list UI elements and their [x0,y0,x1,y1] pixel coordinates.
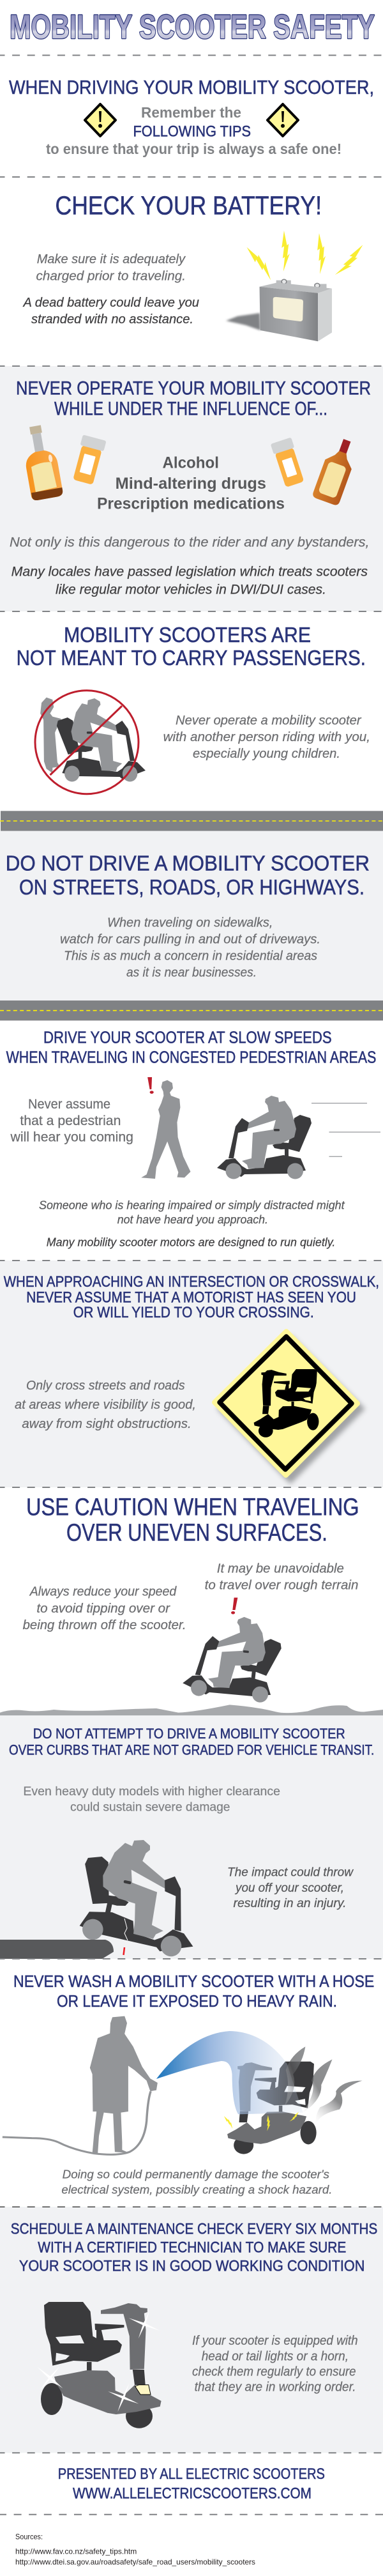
icon: no passengers [35,691,146,794]
intersection text: at areas where visibility is good, [15,1398,196,1412]
speed lines [312,1103,380,1156]
panel: uneven surfaces [0,1494,383,1715]
curbs text top: Even heavy duty models with higher clearance [23,1785,280,1798]
sources: http://www.dtei.sa.gov.au/roadsafety/safe_road_users/mobility_scooters [15,2557,255,2566]
panel: passengers [17,624,370,794]
intersection heading [4,1273,379,1321]
icon: liquor bottle right [312,436,360,507]
uneven text left: to avoid tipping over or [36,1602,170,1616]
uneven heading: OVER UNEVEN SURFACES. [66,1520,327,1547]
slow speeds heading [6,1029,376,1066]
passengers text: especially young children. [193,747,340,761]
icon: pedestrian with alert [141,1077,191,1179]
footer credit [58,2465,325,2503]
streets text: When traveling on sidewalks, [107,916,273,930]
passengers heading [17,624,366,670]
road divider top [0,811,383,831]
icon: pill bottle left [71,434,107,486]
curbs background [0,1715,383,1959]
influence heading [16,378,371,419]
icon: scooter tipping off curb [70,1829,213,1961]
panel: battery [22,191,367,341]
streets background [0,831,383,1000]
intersection text: Only cross streets and roads [26,1379,185,1393]
panel: intro [9,76,374,157]
curbs text top: could sustain severe damage [70,1800,230,1814]
intro text: to ensure that your trip is always a safe one! [46,141,342,157]
intersection text: away from sight obstructions. [22,1417,192,1431]
intersection background [0,1261,383,1487]
icon: warning left [85,104,116,136]
influence background [0,366,383,611]
uneven text left [23,1585,186,1632]
pedestrian text [10,1097,133,1145]
curbs text right: you off your scooter, [234,1882,344,1895]
passengers text [163,714,370,761]
influence list: Alcohol [162,454,219,472]
streets heading: DO NOT DRIVE A MOBILITY SCOOTER [6,852,370,876]
influence text: like regular motor vehicles in DWI/DUI cases. [56,582,326,597]
washing heading: OR LEAVE IT EXPOSED TO HEAVY RAIN. [57,1991,337,2011]
maintenance text [192,2334,358,2395]
uneven text right: to travel over rough terrain [205,1579,358,1593]
streets text [60,916,320,979]
passengers text: with another person riding with you, [163,730,370,744]
slow speeds text: Someone who is hearing impaired or simply distracted might [39,1198,345,1211]
streets text: watch for cars pulling in and out of driveways. [60,933,320,947]
maintenance text: If your scooter is equipped with [192,2334,358,2348]
uneven text left: Always reduce your speed [29,1585,177,1599]
passengers text: Never operate a mobility scooter [176,714,362,728]
icon: whiskey bottle left [19,424,64,501]
pedestrian text: that a pedestrian [20,1114,121,1128]
battery text: A dead battery could leave you [22,296,199,310]
maintenance text: that they are in working order. [195,2380,356,2395]
battery text: stranded with no assistance. [31,312,193,326]
influence text [10,535,370,597]
icon: alert [231,1598,237,1614]
passengers heading: MOBILITY SCOOTERS ARE [64,624,311,647]
influence list: Prescription medications [97,495,285,513]
panel: intersection [0,1261,383,1487]
panel: curbs [0,1715,383,1961]
streets heading [6,852,370,900]
influence heading: WHILE UNDER THE INFLUENCE OF... [54,398,327,419]
water spray [156,2031,303,2114]
panel: slow speeds [6,1029,380,1249]
road divider bottom [0,1000,383,1020]
icon: damaged scooter [223,2062,317,2154]
slow speeds text: not have heard you approach. [117,1213,268,1226]
smoke [285,2046,363,2124]
panel: maintenance [0,2207,383,2453]
icon: yellow scooter sign [214,1331,365,1484]
curb [0,1940,114,1959]
footer credit: PRESENTED BY ALL ELECTRIC SCOOTERS [58,2465,325,2483]
pedestrian text: Never assume [28,1097,110,1112]
intersection text [15,1379,196,1431]
battery text: charged prior to traveling. [36,270,186,284]
streets text: This is as much a concern in residential areas [64,949,317,963]
icon: pill bottle right [271,438,305,487]
maintenance text: head or tail lights or a horn, [202,2349,349,2363]
washing text [61,2167,332,2196]
intro text: Remember the [141,104,241,121]
washing text: Doing so could permanently damage the scooter's [63,2167,329,2181]
influence text: Not only is this dangerous to the rider and any bystanders, [10,535,370,550]
battery text: Make sure it is adequately [37,252,186,266]
icon: warning right [267,104,298,136]
curbs text right: resulting in an injury. [234,1897,346,1910]
icon: scooter on rough terrain [181,1611,284,1704]
panel: streets [0,831,383,1000]
uneven heading [26,1494,359,1547]
icon: scooter with rider [217,1096,312,1179]
uneven text right: It may be unavoidable [217,1562,344,1576]
curbs heading: DO NOT ATTEMPT TO DRIVE A MOBILITY SCOOTER [33,1726,345,1742]
curbs heading [9,1726,374,1758]
battery text [22,252,199,326]
influence list: Mind-altering drugs [116,475,266,493]
streets text: as it is near businesses. [126,965,257,979]
panel: influence [0,366,383,611]
sources [15,2532,255,2566]
sources: Sources: [15,2532,43,2541]
icon: lightning bolts [245,231,367,282]
influence text: Many locales have passed legislation which treats scooters [11,565,368,579]
intro text: FOLLOWING TIPS [133,123,251,141]
footer credit: WWW.ALLELECTRICSCOOTERS.COM [73,2485,312,2503]
influence list [97,454,285,513]
maintenance heading: WITH A CERTIFIED TECHNICIAN TO MAKE SURE [38,2239,346,2257]
washing text: electrical system, possibly creating a shock hazard. [61,2182,332,2196]
slow speeds heading: DRIVE YOUR SCOOTER AT SLOW SPEEDS [43,1029,332,1047]
uneven text left: being thrown off the scooter. [23,1618,186,1632]
maintenance text: check them regularly to ensure [192,2365,356,2379]
curbs text right [227,1866,354,1910]
curbs text right: The impact could throw [227,1866,354,1880]
curbs text top [23,1785,280,1814]
intersection heading: OR WILL YIELD TO YOUR CROSSING. [73,1304,314,1321]
sources: http://www.fav.co.nz/safety_tips.htm [15,2547,137,2556]
icon: scooter with highlights [27,2302,165,2428]
panel: washing [3,1972,374,2196]
battery heading: CHECK YOUR BATTERY! [55,191,322,220]
slow speeds text: Many mobility scooter motors are designed to run quietly. [47,1236,335,1249]
washing heading [13,1972,374,2011]
maintenance background [0,2207,383,2453]
slow speeds text [39,1198,345,1249]
uneven text right [205,1562,358,1593]
icon: battery [226,279,332,341]
intro text [46,104,342,157]
uneven ground [0,1705,383,1715]
maintenance heading [11,2221,377,2275]
pedestrian text: will hear you coming [10,1130,133,1145]
icon: person with hose [3,2016,158,2154]
